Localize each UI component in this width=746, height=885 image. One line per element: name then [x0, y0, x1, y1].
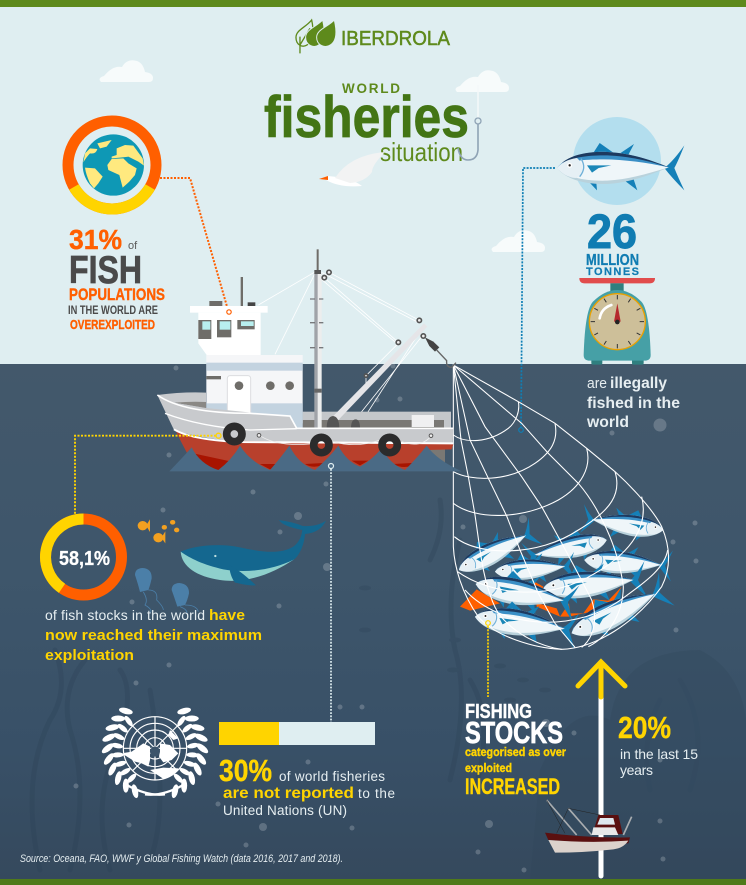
- figure: 26 million tonnes: 26: [587, 206, 637, 259]
- boom: [327, 323, 427, 428]
- icon: weighing scale: [579, 278, 655, 365]
- logo: Iberdrola: [296, 20, 451, 53]
- drifting bubbles: [74, 364, 698, 872]
- panel: 58,1% maximum exploitation: [45, 519, 326, 664]
- wheelhouse: [190, 277, 268, 355]
- text: illegally fished: [586, 375, 680, 431]
- mast: [310, 249, 323, 429]
- bottom green bar: [0, 879, 746, 885]
- text: 30% not reported: to the: [358, 786, 395, 801]
- text block: [68, 224, 165, 332]
- icon: seagull: [319, 152, 385, 186]
- text block: FISH: [69, 249, 142, 292]
- icon: globe in donut ring: [68, 121, 156, 209]
- text: 20%: in the last 15: [620, 746, 698, 762]
- title: situation: [380, 137, 463, 167]
- donut value: 58,1%: [59, 548, 110, 570]
- white dotted connector to UN bar: [328, 464, 334, 722]
- text: maximum exploitation: now reached their maximum: [45, 627, 262, 644]
- progress bar 30%: [219, 722, 375, 745]
- block and hook: [425, 337, 456, 367]
- icon: small fishing boat: [545, 800, 632, 853]
- lower cabin: [206, 355, 303, 428]
- clouds: [100, 60, 545, 252]
- dotted connector orange: [160, 178, 228, 310]
- panel: 26 million tonnes: [557, 117, 684, 431]
- underwater silhouettes: [32, 500, 746, 879]
- icon: fishing hook: [458, 85, 481, 160]
- icon: leaves: [296, 20, 336, 53]
- text: maximum exploitation: of fish stocks in the world: [45, 607, 205, 623]
- dotted connector blue: [519, 168, 555, 432]
- laurel wreath: [100, 706, 210, 799]
- wave foreground: [169, 446, 462, 471]
- fishing net: [453, 365, 669, 649]
- figure: 26 million tonnes: MILLION: [586, 252, 639, 269]
- orange dot on wheelhouse: [227, 310, 231, 314]
- text: illegally fished: fished in the: [587, 395, 680, 412]
- text: 30% not reported: are not reported: [223, 785, 354, 802]
- text: 30% not reported: 30%: [219, 753, 272, 788]
- title: WORLD: [342, 81, 400, 96]
- text: illegally fished: are: [587, 376, 607, 392]
- rear deck: [303, 412, 451, 470]
- text: illegally fished: illegally: [610, 375, 667, 392]
- arrow: increase: [578, 662, 625, 876]
- text: fishing stocks: STOCKS: [465, 715, 563, 750]
- text block: OVEREXPLOITED: [70, 317, 155, 332]
- sky background: [0, 0, 746, 364]
- rigging cables: [258, 272, 422, 422]
- hull: [157, 392, 453, 470]
- text: fishing stocks: categorised as over: [465, 745, 566, 759]
- icon: jellyfish: [135, 568, 198, 614]
- text: 20%: [618, 710, 698, 778]
- text block: of: [128, 240, 138, 252]
- icon: whale: [181, 520, 326, 585]
- sea background: [0, 364, 746, 880]
- text: fishing stocks: [465, 701, 566, 799]
- figure: 26 million tonnes: TONNES: [586, 266, 639, 278]
- text: 20%: 20%: [618, 710, 671, 745]
- panel: 31% overexploited: [68, 121, 228, 332]
- text block: 31%: [69, 224, 122, 255]
- text: maximum exploitation: [45, 607, 262, 664]
- text: 30% not reported: of world fisheries: [279, 769, 385, 784]
- text: fishing stocks: exploited: [465, 761, 512, 775]
- title: fisheries: [264, 85, 469, 150]
- text block: POPULATIONS: [69, 285, 165, 304]
- text: 30% not reported: [219, 753, 395, 818]
- donut chart: [46, 519, 122, 595]
- text: fishing stocks: INCREASED: [465, 774, 560, 799]
- title: [264, 81, 469, 167]
- panel: UN 30%: [100, 706, 395, 818]
- text: fishing stocks: FISHING: [465, 701, 532, 723]
- dotted connector yellow: [486, 621, 490, 697]
- icon: clownfish: [138, 519, 179, 543]
- text: 30% not reported: United Nations (UN): [223, 803, 347, 818]
- pulleys: [322, 270, 425, 377]
- icon: UN emblem: [100, 706, 210, 799]
- logo wordmark: IBERDROLA: [341, 28, 451, 50]
- text: maximum exploitation: exploitation: [45, 647, 134, 664]
- text: maximum exploitation: have: [209, 607, 245, 624]
- icon: tuna on circle: [557, 117, 684, 205]
- panel: fishing stocks: [465, 621, 698, 876]
- school of tuna in net: [451, 503, 675, 650]
- yellow dotted connector from boat: [75, 433, 221, 514]
- source line: Source: Oceana, FAO, WWF y Global Fishing Watch (data 2016, 2017 and 2018).: [20, 853, 343, 865]
- text: illegally fished: world: [586, 414, 629, 431]
- text: 20%: years: [620, 762, 653, 778]
- tyre fenders: [227, 426, 397, 453]
- top green bar: [0, 0, 746, 7]
- text block: IN THE WORLD ARE: [68, 303, 158, 317]
- fishing boat: [157, 249, 462, 471]
- orange fish: [460, 582, 622, 617]
